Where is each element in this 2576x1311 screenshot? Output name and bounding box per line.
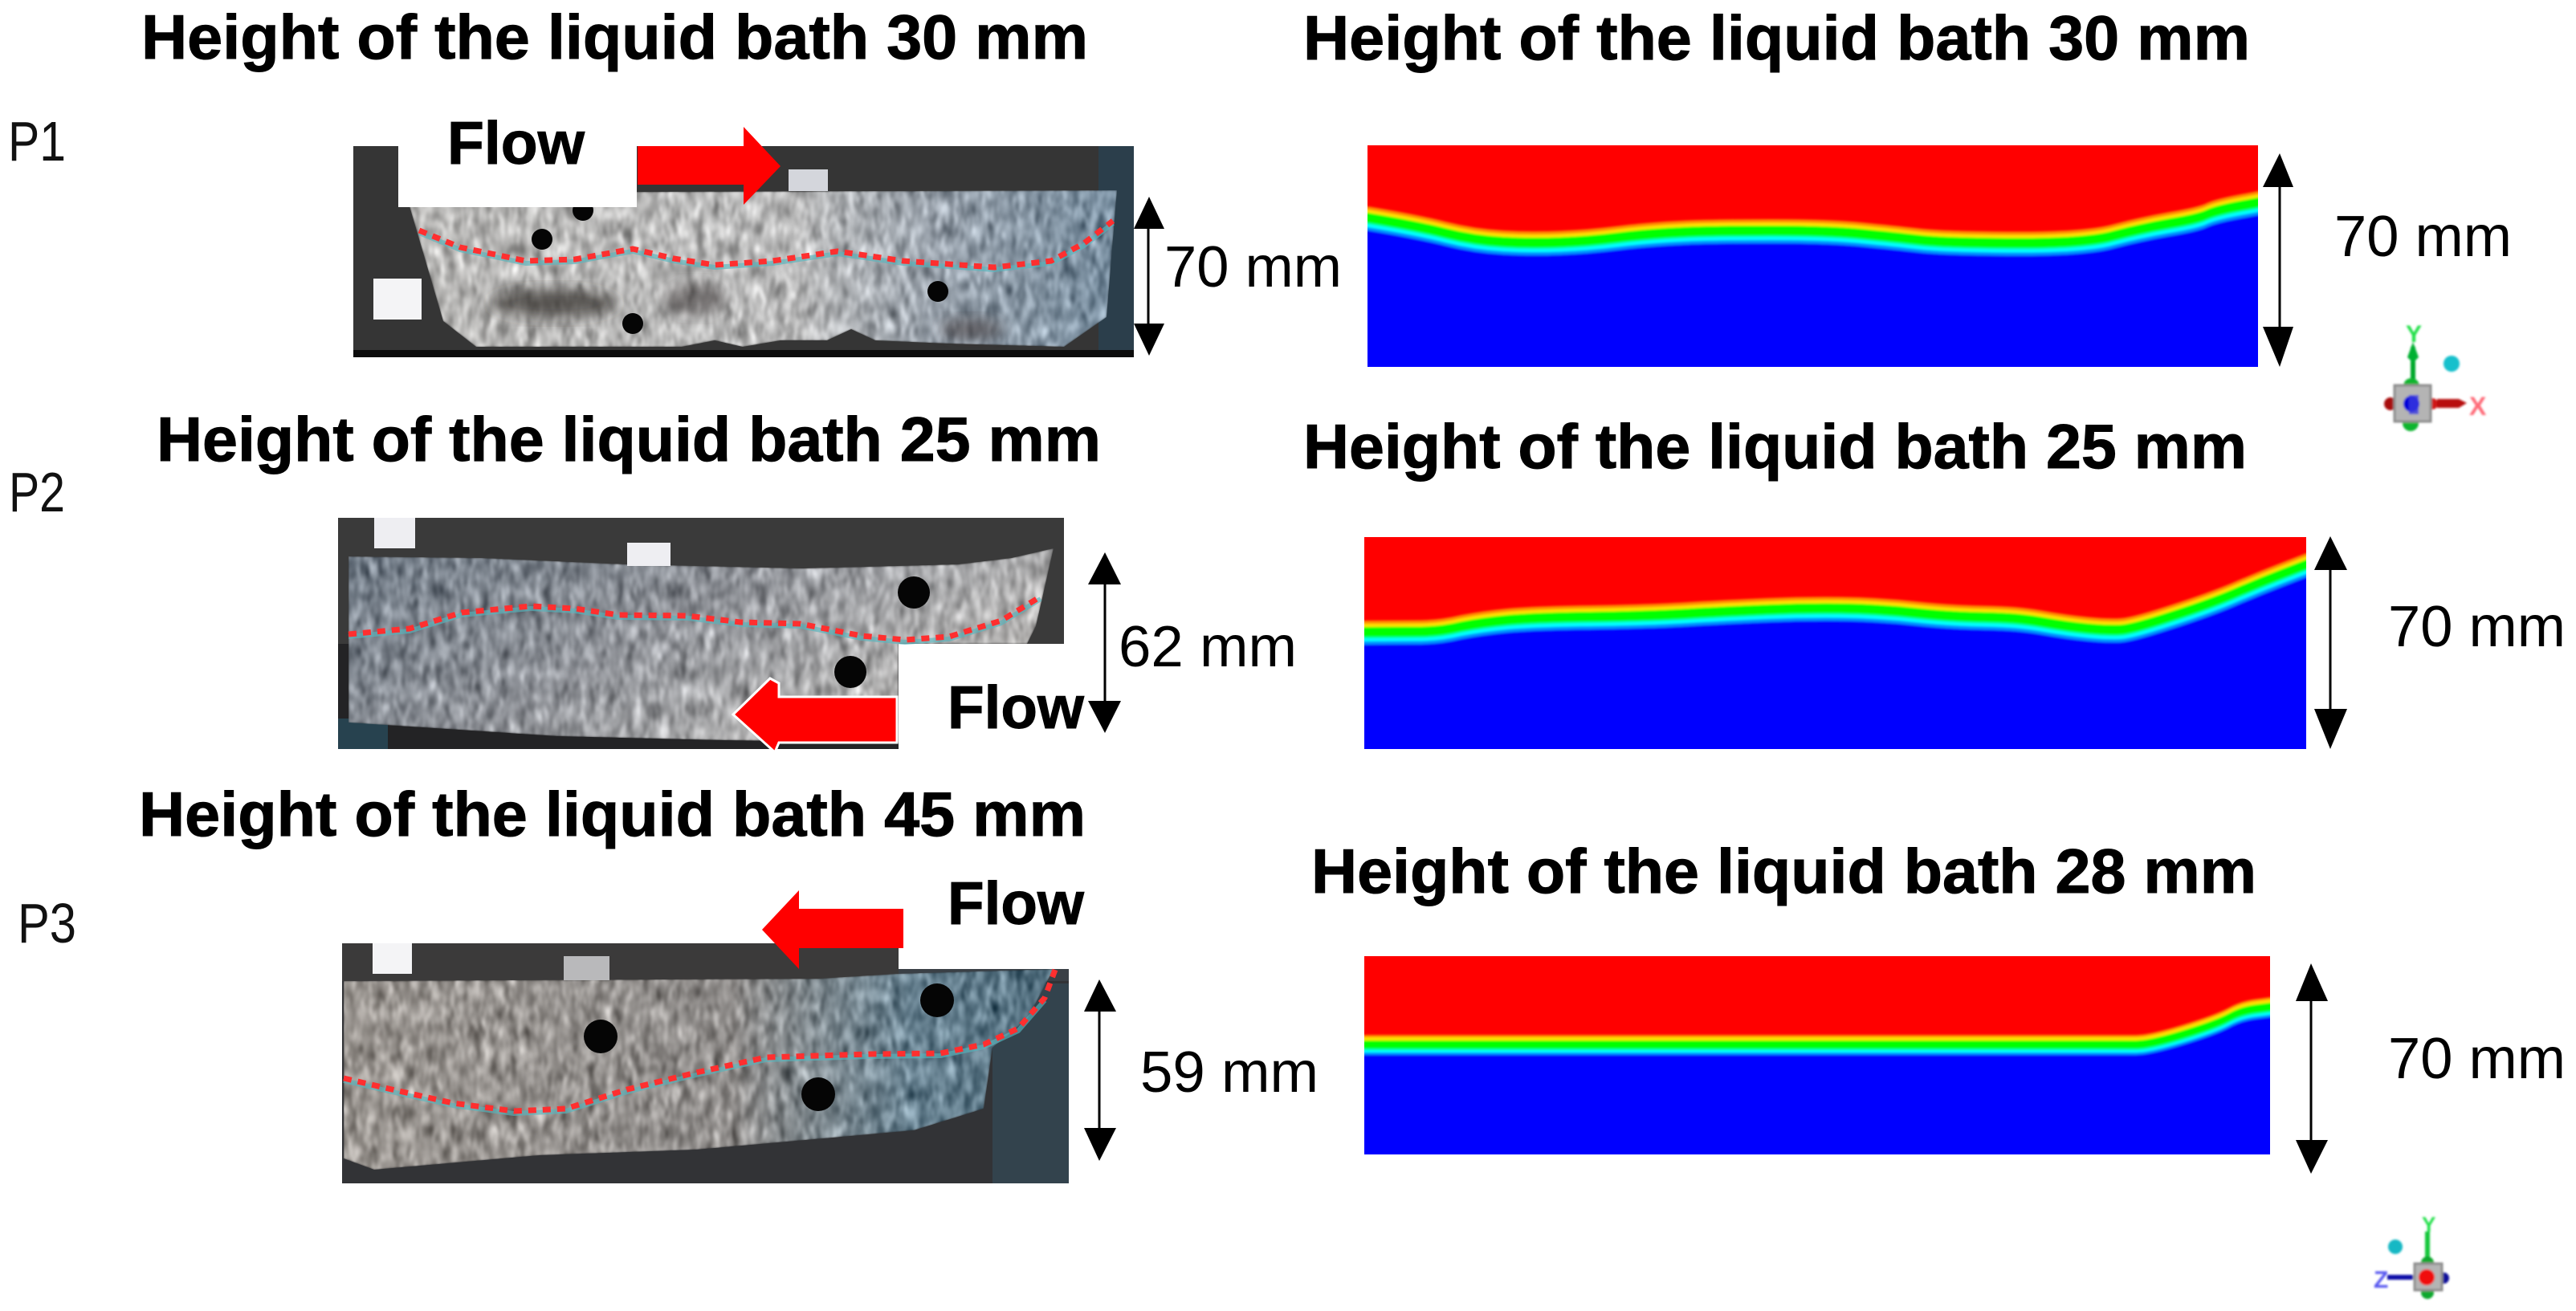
dimension label sim P3: 70 mm xyxy=(2388,1027,2566,1091)
heading: P2 experiment: Height of the liquid bath 25 mm xyxy=(157,404,1101,474)
specimen section xyxy=(406,190,1117,347)
panel: P3 simulation contour xyxy=(1364,956,2270,1154)
label: P2: P2 xyxy=(9,461,65,523)
dimension label 62 mm: 62 mm xyxy=(1119,615,1297,679)
flow label P1: Flow xyxy=(447,109,585,177)
interface dashed line xyxy=(419,221,1113,270)
panel: P3 specimen photo xyxy=(342,943,1069,1183)
dimension arrow sim P3 xyxy=(2296,963,2328,1174)
icon: XY orientation triad: X xyxy=(2469,392,2487,421)
dimension arrow sim P2 xyxy=(2314,536,2347,749)
interface dashed line xyxy=(344,970,1055,1114)
dimension arrow P2 xyxy=(1088,552,1121,733)
heading: P2 simulation: Height of the liquid bath 25 mm xyxy=(1303,411,2247,482)
specimen section xyxy=(348,548,1054,743)
dimension label sim P1: 70 mm xyxy=(2334,205,2512,269)
dimension label 70 mm P1: 70 mm xyxy=(1164,235,1342,299)
icon: XY orientation triad: Y xyxy=(2406,321,2422,348)
interface dashed line xyxy=(348,596,1041,642)
white cover xyxy=(398,136,637,207)
flow label P3: Flow xyxy=(948,869,1085,937)
sample tags xyxy=(374,518,670,566)
panel: P2 specimen photo xyxy=(338,518,1064,749)
panel: P1 specimen photo xyxy=(353,136,1134,357)
icon: YZ orientation triad: Z xyxy=(2374,1267,2388,1293)
measurement markers xyxy=(532,200,948,334)
sample tags xyxy=(373,943,609,980)
dimension label sim P2: 70 mm xyxy=(2388,595,2566,659)
measurement markers xyxy=(834,576,930,688)
heading: P3 simulation: Height of the liquid bath 28 mm xyxy=(1311,836,2256,906)
heading: P1 simulation: Height of the liquid bath 30 mm xyxy=(1303,2,2250,73)
panel: P2 simulation contour xyxy=(1364,537,2306,749)
label: P1: P1 xyxy=(8,110,66,173)
flow arrow P2 xyxy=(733,678,897,752)
heading: P1 experiment: Height of the liquid bath 30 mm xyxy=(141,2,1088,72)
specimen section xyxy=(344,969,1054,1170)
flow arrow P1 xyxy=(638,127,781,205)
measurement markers xyxy=(584,983,954,1111)
dimension arrow P1 xyxy=(1134,197,1164,356)
icon: XY orientation triad xyxy=(2384,321,2487,431)
sample tags xyxy=(373,169,828,320)
panel: P1 simulation contour xyxy=(1367,145,2258,367)
dimension arrow P3 xyxy=(1084,979,1116,1161)
icon: YZ orientation triad xyxy=(2374,1212,2449,1299)
heading: P3 experiment: Height of the liquid bath 45 mm xyxy=(139,779,1086,849)
dimension arrow sim P1 xyxy=(2263,153,2293,367)
label: P3: P3 xyxy=(18,892,76,955)
flow label P2: Flow xyxy=(948,674,1085,741)
icon: YZ orientation triad: Y xyxy=(2422,1212,2435,1236)
flow arrow P3 xyxy=(762,890,903,969)
dimension label 59 mm: 59 mm xyxy=(1140,1040,1319,1105)
